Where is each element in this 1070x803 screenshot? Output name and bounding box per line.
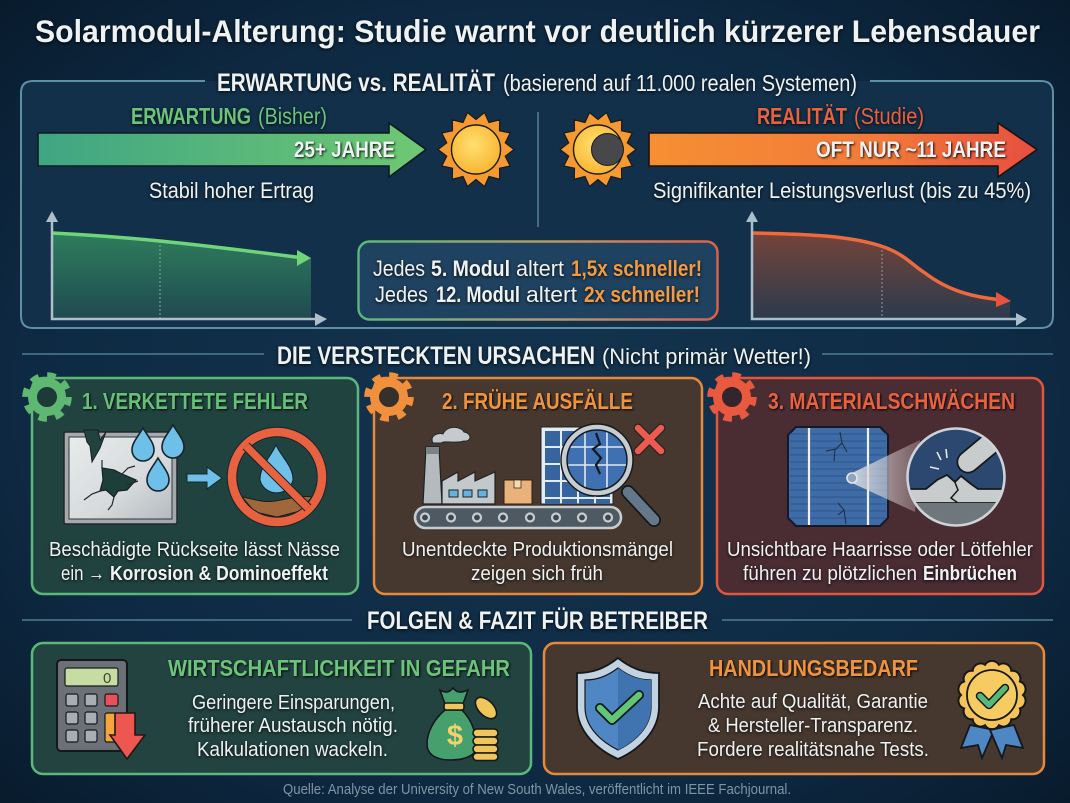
label: Realität: REALITÄT — [757, 103, 847, 129]
icon: red cross — [638, 428, 661, 451]
title: Solarmodul-Alterung: Studie warnt vor deutlich kürzerer Lebensdauer — [35, 13, 1040, 49]
icon: no water corrosion sign — [232, 432, 322, 522]
icon: green gear — [26, 376, 68, 418]
card text — [697, 690, 929, 761]
card text — [188, 691, 398, 761]
arrow: 25+ Jahre — [38, 123, 426, 177]
callout: faster ageing: 1,5x schneller! — [571, 256, 702, 281]
card heading: 3. MATERIALSCHWÄCHEN — [768, 388, 1015, 414]
text: Leistungsverlust: Signifikanter Leistungsverlust (bis zu 45%) — [653, 178, 1031, 203]
card text: Achte auf Qualität, Garantie — [698, 690, 928, 713]
icon: solar cell with hairline cracks — [788, 427, 888, 526]
callout: faster ageing: Jedes — [375, 282, 428, 307]
chart: expected yield — [46, 211, 327, 326]
card text: & Hersteller-Transparenz. — [708, 714, 918, 737]
card text — [727, 538, 1033, 585]
icon: red gear — [711, 376, 753, 418]
heading: die versteckten Ursachen — [22, 342, 1053, 370]
card text: Kalkulationen wackeln. — [197, 738, 388, 761]
panel: Handlungsbedarf — [544, 643, 1044, 774]
callout: faster ageing: 2x schneller! — [584, 282, 700, 307]
panel heading: ERWARTUNG vs. REALITÄT — [217, 69, 495, 97]
icon: magnified solder joint — [847, 428, 1009, 529]
label: Erwartung: ERWARTUNG — [131, 103, 251, 129]
card text: Beschädigte Rückseite lässt Nässe — [49, 538, 340, 561]
label: Realität — [757, 103, 924, 129]
card text: Korrosion & Dominoeffekt — [110, 562, 328, 585]
card text: Unentdeckte Produktionsmängel — [402, 538, 673, 561]
icon: factory on conveyor — [415, 427, 621, 528]
card heading: WIRTSCHAFTLICHKEIT IN GEFAHR — [168, 655, 510, 681]
card text: Geringere Einsparungen, — [192, 691, 395, 714]
panel: verkettete Fehler — [26, 376, 358, 594]
arrow: leads to — [187, 467, 222, 489]
panel heading: (basierend auf 11.000 realen Systemen) — [503, 70, 857, 96]
panel: Wirtschaftlichkeit — [32, 643, 531, 774]
icon: calculator with down arrow: 0 — [103, 670, 111, 687]
text: stabil hoher Ertrag: Stabil hoher Ertrag — [149, 178, 314, 203]
icon: eclipsed sun — [560, 112, 636, 186]
heading: die versteckten Ursachen: DIE VERSTECKTEN URSACHEN — [277, 342, 595, 370]
icon: shield with check — [577, 658, 659, 759]
panel: Erwartung vs. Realität — [21, 69, 1053, 328]
source note: Quelle: Analyse der University of New South Wales, veröffentlicht im IEEE Fachjournal. — [283, 781, 791, 798]
icon: calculator with down arrow — [57, 660, 145, 759]
card text: Fordere realitätsnahe Tests. — [697, 738, 929, 761]
card text: führen zu plötzlichen — [743, 562, 917, 585]
icon: quality badge — [958, 661, 1026, 758]
panel: frühe Ausfälle — [368, 376, 702, 594]
heading: Folgen und Fazit: FOLGEN & FAZIT FÜR BETREIBER — [367, 606, 708, 635]
label: Realität: (Studie) — [854, 103, 924, 129]
icon: orange gear — [368, 376, 410, 418]
card text: Einbrüchen — [923, 562, 1017, 585]
card text: ein → — [61, 562, 105, 585]
card heading: 2. FRÜHE AUSFÄLLE — [442, 388, 633, 414]
heading: die versteckten Ursachen: (Nicht primär Wetter!) — [602, 344, 811, 369]
icon: money bag and coins: $ — [447, 720, 463, 752]
card text: früherer Austausch nötig. — [188, 714, 398, 737]
icon: sun — [438, 112, 514, 186]
callout: faster ageing: altert — [516, 256, 564, 281]
icon: water drops — [132, 425, 184, 491]
divider — [537, 112, 539, 227]
arrow: oft nur 11 Jahre: OFT NUR ~11 JAHRE — [816, 137, 1006, 162]
card text: zeigen sich früh — [471, 562, 603, 585]
callout: faster ageing: 5. Modul — [431, 256, 510, 281]
arrow: 25+ Jahre: 25+ JAHRE — [294, 137, 395, 162]
card text: Unsichtbare Haarrisse oder Lötfehler — [727, 538, 1033, 561]
icon: magnifying glass — [564, 427, 654, 520]
icon: cracked module — [64, 425, 184, 524]
callout: faster ageing: 12. Modul — [436, 282, 520, 307]
panel: Materialschwächen — [711, 376, 1043, 594]
callout: faster ageing: Jedes — [373, 256, 425, 281]
label: Erwartung: (Bisher) — [258, 103, 327, 129]
callout: faster ageing: altert — [526, 282, 577, 307]
card heading: HANDLUNGSBEDARF — [709, 655, 918, 681]
icon: money bag and coins — [427, 688, 500, 760]
arrow: oft nur 11 Jahre — [649, 123, 1037, 177]
card heading: 1. VERKETTETE FEHLER — [82, 388, 308, 414]
panel heading — [217, 69, 857, 97]
callout: faster ageing — [358, 242, 718, 320]
card text — [49, 538, 340, 585]
chart: real yield — [746, 211, 1027, 326]
card text — [402, 538, 673, 585]
